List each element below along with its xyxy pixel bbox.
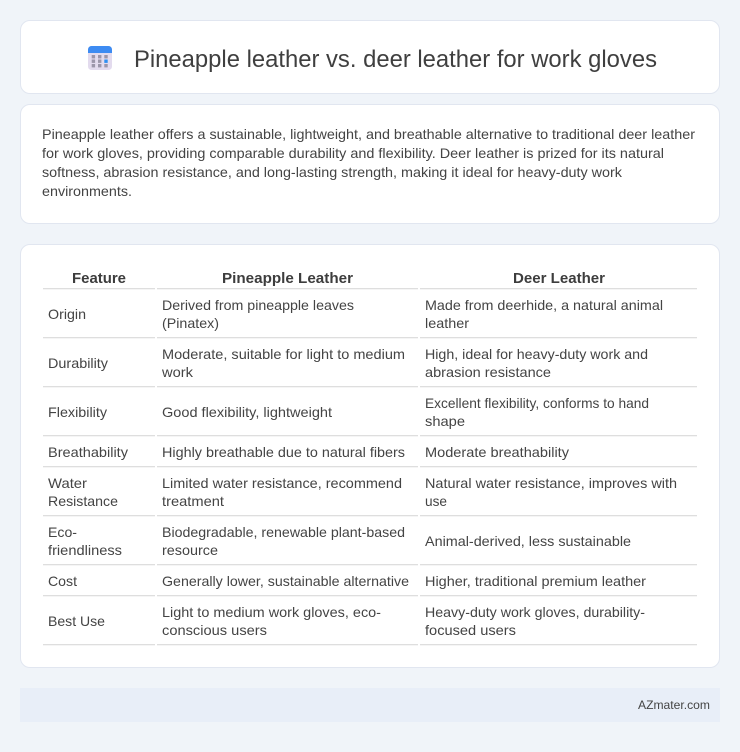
footer credit: AZmater.com bbox=[638, 698, 710, 712]
row: flexibility: Excellent flexibility, conforms to hand bbox=[425, 395, 649, 411]
row: best use: Light to medium work gloves, eco- bbox=[162, 604, 381, 620]
row: flexibility: Flexibility bbox=[48, 404, 107, 420]
footer bar bbox=[20, 688, 720, 722]
row: breathability: Moderate breathability bbox=[425, 444, 569, 460]
row: durability: work bbox=[161, 364, 194, 380]
row: eco-friendliness: Biodegradable, renewable plant-based bbox=[162, 524, 405, 540]
row: water resistance: Resistance bbox=[48, 493, 118, 509]
row: cost: Higher, traditional premium leather bbox=[425, 573, 646, 589]
row: origin: leather bbox=[425, 315, 469, 331]
row: water resistance: Limited water resistance, recommend bbox=[162, 475, 402, 491]
row: eco-friendliness: friendliness bbox=[48, 542, 122, 558]
row: flexibility bbox=[48, 395, 649, 429]
table header: Pineapple Leather bbox=[222, 270, 353, 287]
row: best use bbox=[48, 604, 645, 638]
row: best use: Heavy-duty work gloves, durability- bbox=[425, 604, 645, 620]
row: water resistance: Water bbox=[48, 475, 87, 491]
row: best use: Best Use bbox=[48, 613, 105, 629]
row: durability: Moderate, suitable for light to medium bbox=[162, 346, 405, 362]
icon: calendar bbox=[88, 46, 112, 70]
row: origin bbox=[48, 297, 663, 331]
row: eco-friendliness bbox=[48, 524, 631, 558]
row: cost bbox=[48, 573, 646, 589]
row: water resistance: use bbox=[425, 493, 447, 509]
row: durability: abrasion resistance bbox=[425, 364, 551, 380]
intro text: softness, abrasion resistance, and long-lasting strength, making it ideal for heavy-duty work bbox=[42, 164, 623, 180]
row: water resistance: treatment bbox=[162, 493, 224, 509]
row: eco-friendliness: Animal-derived, less sustainable bbox=[425, 533, 631, 549]
row: water resistance bbox=[48, 475, 677, 509]
title: Pineapple leather vs. deer leather for work gloves bbox=[134, 46, 657, 73]
row: best use: conscious users bbox=[162, 622, 267, 638]
table header: Feature bbox=[72, 270, 126, 287]
row: water resistance: Natural water resistance, improves with bbox=[425, 475, 677, 491]
row: durability: Durability bbox=[48, 355, 108, 371]
intro text bbox=[42, 126, 695, 199]
row: breathability: Highly breathable due to natural fibers bbox=[162, 444, 405, 460]
row: durability: High, ideal for heavy-duty work and bbox=[425, 346, 648, 362]
row: eco-friendliness: resource bbox=[162, 542, 218, 558]
row: origin: (Pinatex) bbox=[162, 315, 219, 331]
row: cost: Cost bbox=[48, 573, 77, 589]
row: origin: Origin bbox=[48, 306, 86, 322]
table header: Deer Leather bbox=[513, 270, 605, 287]
table header bbox=[72, 270, 605, 287]
row: cost: Generally lower, sustainable alternative bbox=[162, 573, 409, 589]
row: origin: Derived from pineapple leaves bbox=[162, 297, 354, 313]
intro text: Pineapple leather offers a sustainable, lightweight, and breathable alternative to traditional deer leather bbox=[42, 126, 695, 142]
panel: intro card bbox=[20, 104, 720, 224]
intro text: for work gloves, providing comparable durability and flexibility. Deer leather is prized for its natural bbox=[42, 145, 664, 161]
intro text: environments. bbox=[42, 183, 132, 199]
row: origin: Made from deerhide, a natural animal bbox=[425, 297, 663, 313]
panel: table card bbox=[20, 244, 720, 668]
comparison table bbox=[43, 270, 697, 645]
row: eco-friendliness: Eco- bbox=[48, 524, 77, 540]
row: breathability bbox=[48, 444, 569, 460]
row: flexibility: shape bbox=[425, 413, 465, 429]
row: breathability: Breathability bbox=[48, 444, 128, 460]
panel: title card bbox=[20, 20, 720, 94]
row: best use: focused users bbox=[425, 622, 516, 638]
row: flexibility: Good flexibility, lightweight bbox=[162, 404, 332, 420]
row: durability bbox=[48, 346, 648, 380]
row borders bbox=[43, 288, 697, 645]
